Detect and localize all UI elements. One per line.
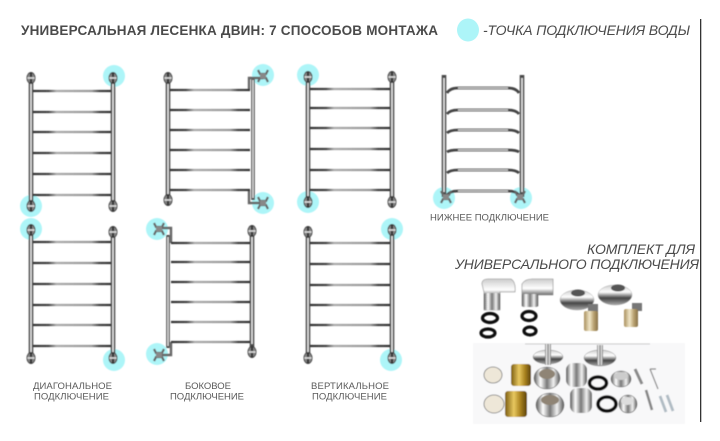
towel rail: side connection, top <box>164 64 274 214</box>
towel rail: side connection, bottom <box>146 218 256 365</box>
label: diagonal connection <box>33 381 112 402</box>
legend: water connection point: -ТОЧКА ПОДКЛЮЧЕНИЯ ВОДЫ <box>483 22 691 38</box>
label: side connection: ПОДКЛЮЧЕНИЕ <box>170 392 244 402</box>
kit heading <box>454 241 699 272</box>
label: vertical connection: ПОДКЛЮЧЕНИЕ <box>312 392 387 402</box>
kit heading: КОМПЛЕКТ ДЛЯ <box>587 241 695 257</box>
kit photo: elbows and flanges <box>481 279 642 337</box>
label: side connection <box>170 381 244 402</box>
towel rail: diagonal, bottom <box>20 218 125 371</box>
label: side connection: БОКОВОЕ <box>185 381 231 392</box>
label: diagonal connection: ПОДКЛЮЧЕНИЕ <box>34 392 109 402</box>
label: bottom connection: НИЖНЕЕ ПОДКЛЮЧЕНИЕ <box>430 212 549 224</box>
towel rail: vertical, bottom <box>304 218 403 371</box>
towel rail: diagonal, top <box>20 65 125 217</box>
towel rail: vertical, top <box>297 64 396 213</box>
kit photo: valves, brass fittings, caps and pins <box>473 343 685 424</box>
title: УНИВЕРСАЛЬНАЯ ЛЕСЕНКА ДВИН: 7 СПОСОБОВ МОНТАЖА <box>21 23 438 38</box>
kit heading: УНИВЕРСАЛЬНОГО ПОДКЛЮЧЕНИЯ <box>454 256 699 272</box>
vertical rule <box>700 19 701 422</box>
towel rail: bottom connection <box>433 75 532 209</box>
label: diagonal connection: ДИАГОНАЛЬНОЕ <box>33 381 112 392</box>
label: vertical connection <box>311 381 389 402</box>
label: vertical connection: ВЕРТИКАЛЬНОЕ <box>311 381 389 392</box>
legend: water connection point <box>457 18 691 42</box>
